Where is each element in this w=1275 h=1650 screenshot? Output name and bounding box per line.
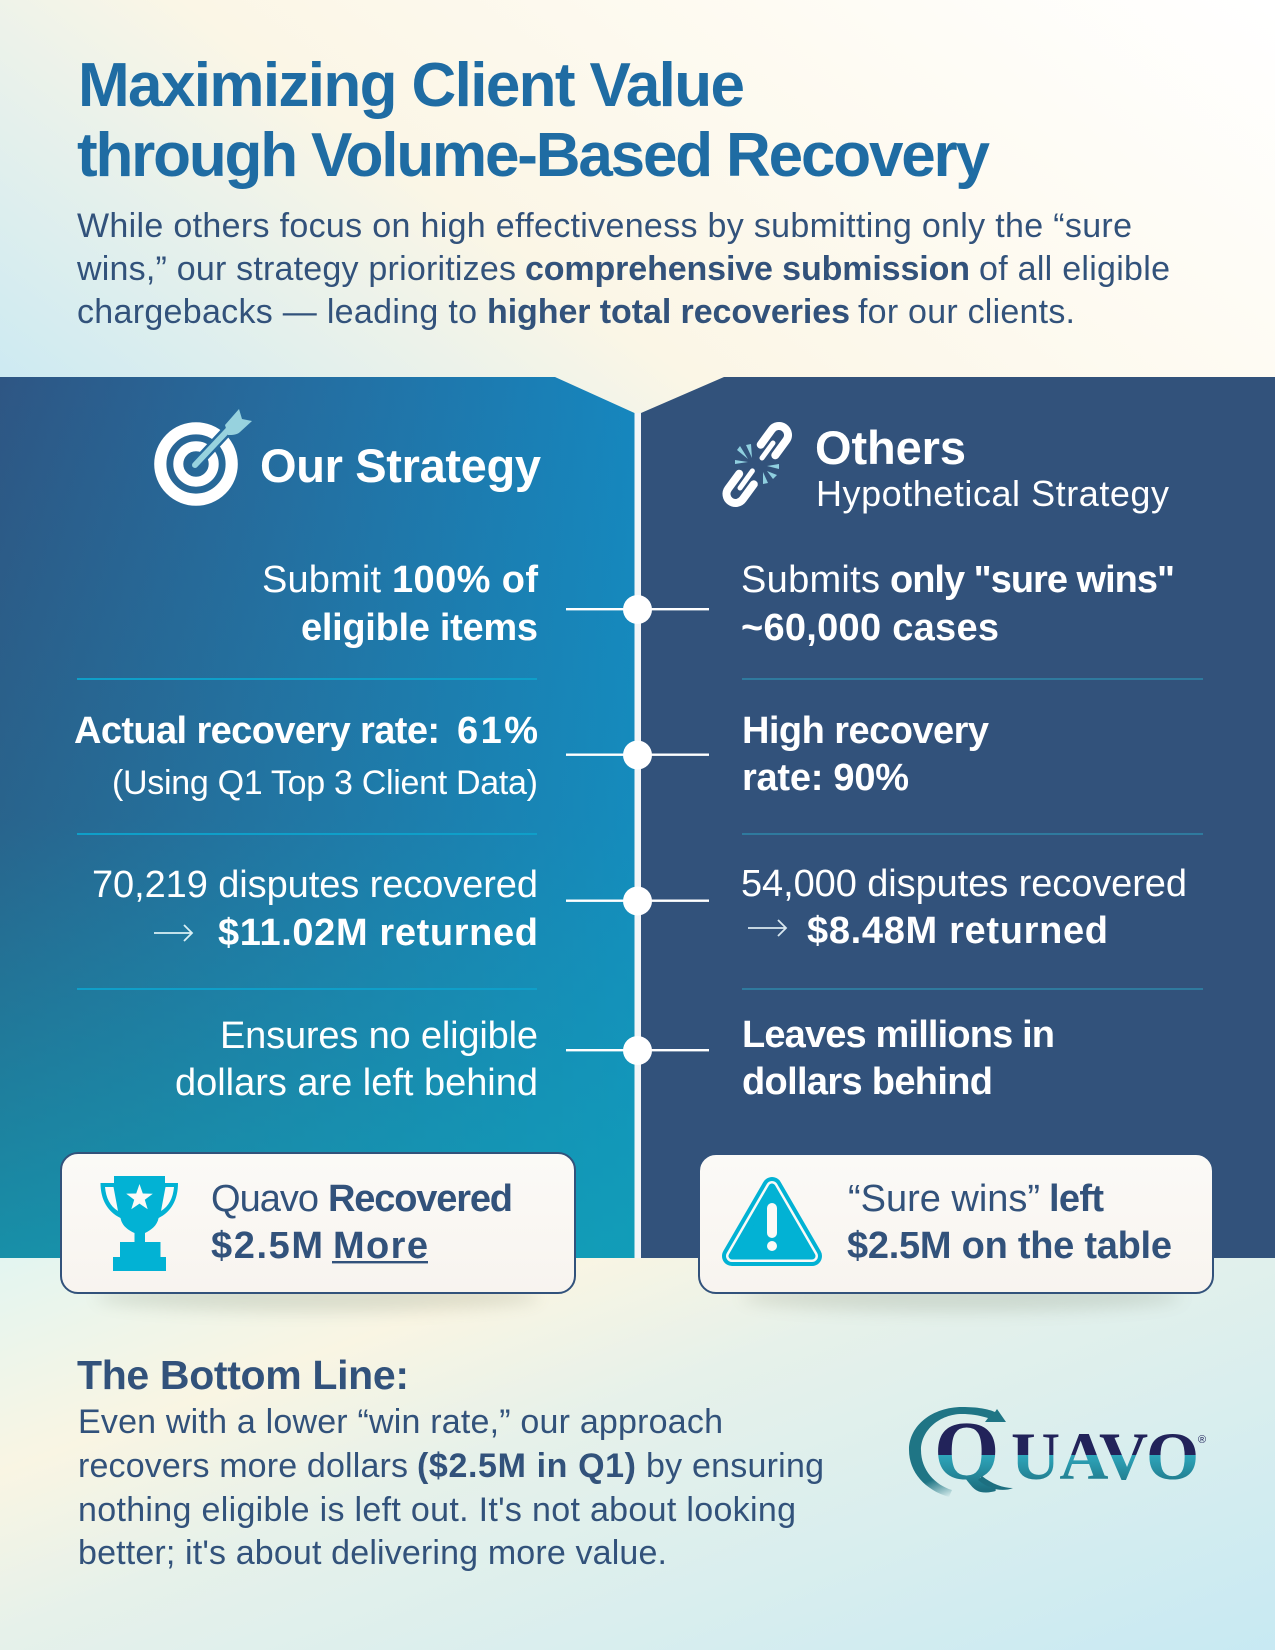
bottom line paragraph: Even with a lower “win rate,” our approach <box>78 1403 723 1441</box>
row 3 text <box>741 863 1187 952</box>
row 4 text: dollars are left behind <box>175 1062 538 1104</box>
row 2 text <box>742 710 989 799</box>
background: upper gradient <box>0 0 1275 420</box>
bottom line heading: The Bottom Line: <box>77 1352 409 1398</box>
card text: Quavo <box>211 1178 319 1220</box>
row 2 text: Actual recovery rate: <box>74 710 440 752</box>
row 1 text: ~60,000 cases <box>741 607 999 649</box>
background: lower gradient <box>0 1258 1275 1650</box>
title: Maximizing Client Value <box>78 51 745 120</box>
intro paragraph: higher total recoveries <box>487 293 850 331</box>
card text: left <box>1049 1178 1104 1220</box>
arrow <box>748 920 786 936</box>
row 2 text: High recovery <box>742 710 989 752</box>
bottom line paragraph <box>78 1403 824 1572</box>
card text: More <box>333 1225 428 1267</box>
row 4 text <box>175 1015 538 1104</box>
logo: quavo <box>909 1405 1206 1498</box>
card text: “Sure wins” <box>848 1178 1040 1220</box>
intro paragraph: of all eligible <box>979 250 1170 288</box>
row 2 text: (Using Q1 Top 3 Client Data) <box>112 764 538 802</box>
row 3 text: $8.48M returned <box>807 910 1108 952</box>
card text <box>847 1178 1172 1267</box>
heading: our strategy: Our Strategy <box>260 439 541 492</box>
arrow <box>154 925 192 941</box>
icon: trophy <box>100 1176 178 1271</box>
card text: $2.5M on the table <box>847 1225 1172 1267</box>
row 2 text: rate: 90% <box>742 757 909 799</box>
intro paragraph <box>76 207 1170 331</box>
bottom line paragraph: nothing eligible is left out. It's not about looking <box>78 1491 796 1529</box>
row 3 text: 70,219 disputes recovered <box>92 864 538 906</box>
logo: quavo: Q <box>934 1405 999 1498</box>
logo: quavo: UAVO <box>1011 1418 1199 1494</box>
bottom line paragraph: better; it's about delivering more value. <box>78 1534 667 1572</box>
bottom line paragraph: ($2.5M in Q1) <box>417 1447 636 1485</box>
row 2 text <box>74 710 538 802</box>
panel: others <box>641 377 1275 1258</box>
icon: target with arrow <box>160 409 252 500</box>
bottom line paragraph: by ensuring <box>646 1447 824 1485</box>
card text: Recovered <box>328 1178 513 1220</box>
panel: our strategy <box>0 377 634 1258</box>
row 1 text: Submit <box>262 559 381 601</box>
row 1 text <box>741 559 1175 649</box>
intro paragraph: chargebacks — leading to <box>77 293 477 331</box>
title <box>77 51 991 190</box>
icon: broken chain <box>726 426 788 503</box>
row 2 text: 61% <box>457 710 538 752</box>
intro paragraph: comprehensive submission <box>525 250 970 288</box>
row 3 text: $11.02M returned <box>218 912 538 954</box>
card text <box>211 1178 513 1267</box>
row 1 text: 100% of <box>392 559 538 601</box>
row 1 text: Submits <box>741 559 880 601</box>
row 3 text <box>92 864 538 954</box>
card: quavo recovered <box>61 1153 575 1312</box>
heading: others: Others <box>815 421 966 474</box>
row 1 text: eligible items <box>301 607 538 649</box>
intro paragraph: wins,” our strategy prioritizes <box>76 250 516 288</box>
logo: quavo: ® <box>1198 1434 1206 1446</box>
row 4 text: Ensures no eligible <box>220 1015 538 1057</box>
subheading: hypothetical strategy: Hypothetical Strategy <box>816 473 1169 514</box>
icon: warning triangle <box>732 1187 812 1256</box>
header <box>76 51 1170 331</box>
bottom line paragraph: recovers more dollars <box>78 1447 408 1485</box>
title: through Volume-Based Recovery <box>77 121 991 190</box>
row 4 text: dollars behind <box>742 1061 993 1103</box>
row 1 text <box>262 559 538 649</box>
row 1 text: only "sure wins" <box>890 559 1175 601</box>
row 4 text: Leaves millions in <box>742 1014 1055 1056</box>
bottom line <box>77 1352 824 1572</box>
card: sure wins <box>699 1154 1213 1312</box>
card text: $2.5M <box>211 1225 323 1267</box>
timeline divider <box>566 413 709 1258</box>
row 4 text <box>742 1014 1055 1103</box>
intro paragraph: for our clients. <box>858 293 1075 331</box>
intro paragraph: While others focus on high effectiveness by submitting only the “sure <box>77 207 1132 245</box>
row 3 text: 54,000 disputes recovered <box>741 863 1187 905</box>
